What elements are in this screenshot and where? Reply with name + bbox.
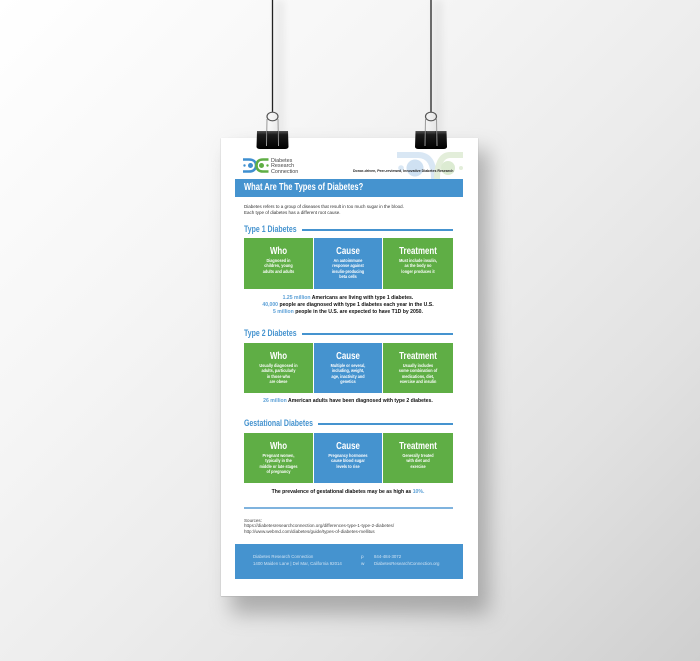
heading: type 2: Type 2 Diabetes [244,328,297,338]
panel: type 1 treatment: Treatment [399,246,437,256]
panel: type 2 cause: Cause [336,350,360,362]
panel: gestational who: of pregnancy [266,469,291,474]
type 1 statistics [262,294,434,315]
type 1 statistics: 5 million people in the U.S. are expected to have T1D by 2050. [273,309,423,315]
heading: type 1: Type 1 Diabetes [244,224,297,234]
type 2 statistic: 26 million American adults have been diagnosed with type 2 diabetes. [263,398,433,404]
panel: gestational who: Pregnant women, [263,452,294,458]
panel: type 1 who: Who [270,246,287,256]
panel: gestational who: Who [270,440,287,452]
panel: type 1 cause: response against [332,263,364,268]
panel: type 2 who: are obese [270,379,287,384]
panel: type 2 cause: genetics [340,379,356,384]
panel: type 1 cause: Cause [336,246,360,256]
panel: gestational who: middle or late stages [259,464,298,469]
footer contact [361,554,440,566]
panel: type 1 cause [314,238,382,289]
panel: gestational treatment: Generally treated [402,452,434,458]
panel: gestational treatment: with diet and [406,458,430,463]
panel: gestational treatment: Treatment [399,440,437,452]
panel: type 1 who: Diagnosed in [266,258,291,262]
type 1 statistics: 1.25 million Americans are living with type 1 diabetes. [283,294,413,300]
panel: gestational treatment: exercise [410,464,426,469]
panel: type 2 treatment: Treatment [399,350,437,362]
tagline: Donor-driven, Peer-reviewed, Innovative Diabetes Research [353,168,453,173]
intro text [244,204,404,216]
footer address: Diabetes Research Connection [253,554,313,559]
watermark logo [397,152,463,179]
logo wordmark [271,158,298,175]
type 1 statistics: 40,000 people are diagnosed with type 1 diabetes each year in the U.S. [262,302,434,308]
sources: Sources: [244,518,262,524]
logo wordmark: Diabetes [271,158,292,164]
panel: type 2 treatment [383,343,453,393]
sources: https://diabetesresearchconnection.org/differences-type-1-type-2-diabetes/ [244,524,394,529]
panel: gestational who: typically in the [265,458,292,463]
panel: type 2 treatment: exercise and insulin [400,379,436,384]
footer [235,544,463,579]
panel: type 2 cause [314,343,382,393]
panel: type 2 who: adults, particularly [261,368,296,373]
panel: gestational treatment [383,433,453,483]
panel: gestational who [244,433,313,483]
logo wordmark: Connection [271,169,298,175]
panel: gestational cause: Pregnancy hormones [328,452,368,458]
panel: type 2 who: Who [270,350,287,362]
footer contact: w [361,561,364,566]
title banner [235,179,463,197]
gestational statistic: The prevalence of gestational diabetes may be as high as 10%. [272,489,424,495]
right clip [415,0,447,149]
panel: type 2 who: Usually diagnosed in [259,362,298,368]
panel: type 2 cause: Multiple or several, [331,362,365,368]
panel: type 2 treatment: some combination of [399,368,437,373]
sources [244,518,394,535]
sources: http://www.webmd.com/diabetes/guide/types-of-diabetes-mellitus [244,530,375,535]
logo mark [243,158,269,173]
panel: type 1 treatment [383,238,453,289]
panel: type 1 who: adults and adults [263,269,294,274]
panel: type 2 cause: including, weight, [332,368,364,373]
footer contact: p [361,554,364,559]
logo wordmark: Research [271,163,294,169]
panel: type 2 treatment: Usually includes [403,362,433,368]
footer address [253,554,342,566]
panel: type 1 who: children, young [264,263,293,268]
footer contact: 844-484-3072 [374,554,401,559]
panel: type 2 who: in those who [267,374,290,379]
panel: type 1 treatment: as the body no [404,263,431,268]
poster sheet [221,138,478,596]
panel: gestational cause [314,433,382,483]
intro text: Diabetes refers to a group of diseases that result in too much sugar in the blood. [244,204,404,210]
intro text: Each type of diabetes has a different root cause. [244,211,340,216]
panel: gestational cause: cause blood sugar [331,458,365,463]
panel: type 2 treatment: medications, diet, [402,374,434,379]
panel: gestational cause: Cause [336,440,360,452]
title banner: What Are The Types of Diabetes? [244,182,363,193]
panel: type 1 cause: An autoimmune [334,258,362,262]
footer address: 1400 Maiden Lane | Del Mar, California 92014 [253,561,342,566]
panel: type 1 cause: insulin-producing [332,269,364,274]
panel: type 1 cause: beta cells [339,274,357,279]
footer contact: DiabetesResearchConnection.org [374,561,439,566]
panel: gestational cause: levels to rise [336,464,360,469]
panel: type 2 who [244,343,313,393]
panel: type 1 treatment: longer produces it [401,269,435,274]
left clip [256,0,288,149]
heading: gestational: Gestational Diabetes [244,418,313,428]
panel: type 1 who [244,238,313,289]
panel: type 2 cause: age, inactivity and [331,374,365,379]
panel: type 1 treatment: Must include insulin, [399,258,437,262]
